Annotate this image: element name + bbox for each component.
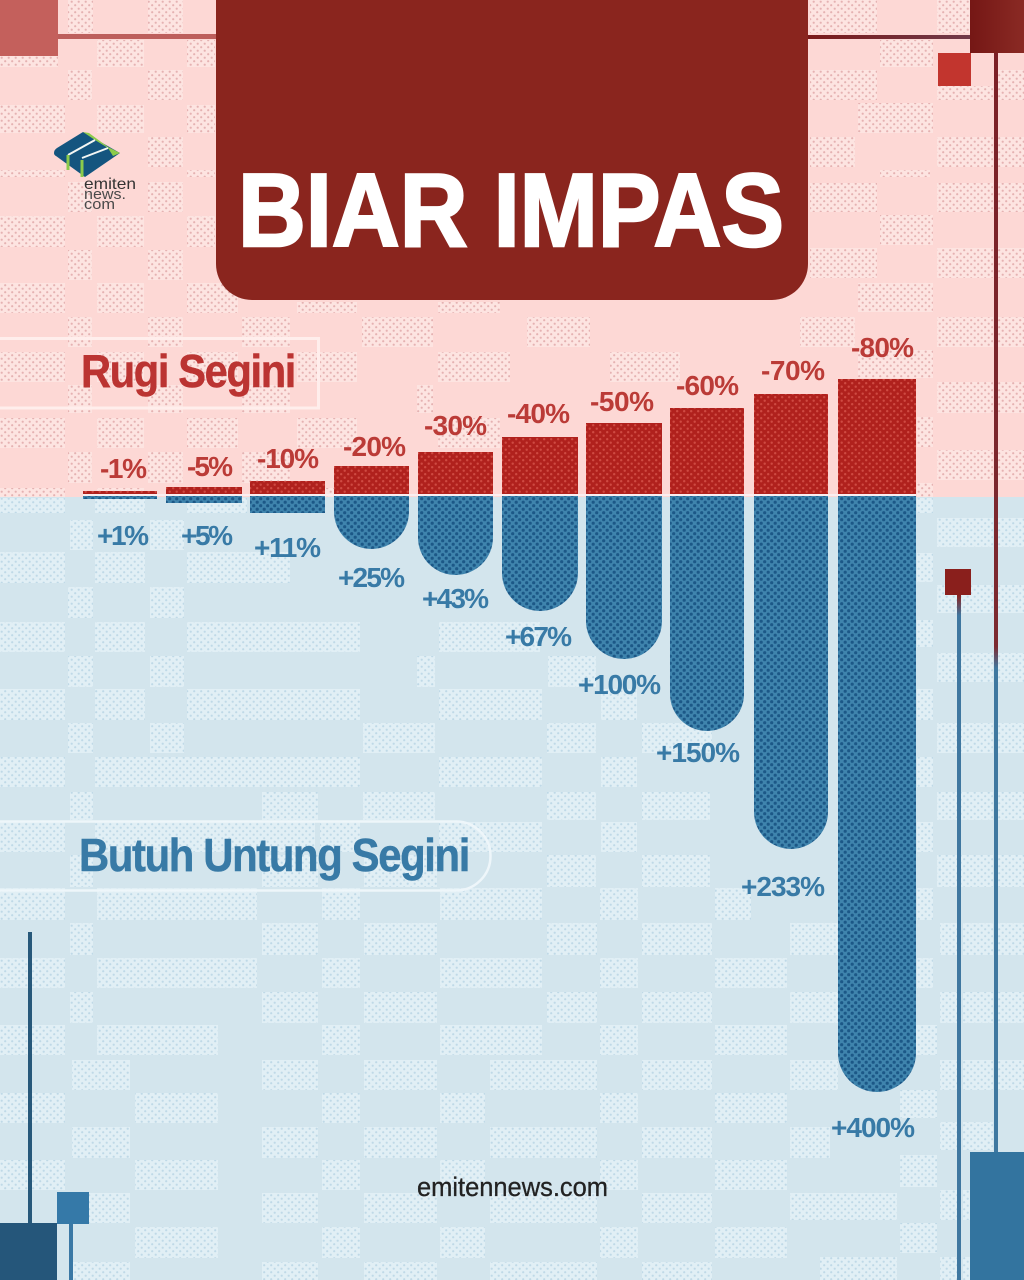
title: BIAR IMPAS: [238, 153, 784, 269]
bar chart: loss versus required gain: [83, 332, 916, 1143]
logo: emitennews.com: news.: [84, 186, 126, 203]
bar pair: -60% / +150%: -60%: [676, 370, 739, 401]
bar pair: -80% / +400%: -80%: [851, 332, 914, 363]
bar pair: -70% / +233%: +233%: [741, 871, 825, 902]
bar pair: -40% / +67%: +67%: [505, 621, 572, 652]
blue dotted checker patches: [0, 498, 1024, 1280]
bar pair: -50% / +100%: +100%: [578, 669, 661, 700]
pink dotted checker patches: [0, 0, 1024, 497]
bar pair: -60% / +150%: [656, 370, 744, 768]
pink background (top half): [0, 0, 1024, 497]
bar pair: -20% / +25%: [334, 431, 409, 593]
vertical marker: dark red square with rule: [945, 569, 971, 1280]
bar pair: -1% / +1%: -1%: [100, 453, 147, 484]
corner accent: bottom left squares and rules: [0, 932, 89, 1280]
bar pair: -5% / +5%: -5%: [187, 451, 233, 482]
label box: Rugi Segini: [0, 338, 318, 408]
bar pair: -30% / +43%: [418, 410, 493, 614]
bar pair: -70% / +233%: -70%: [761, 355, 825, 386]
bar pair: -20% / +25%: +25%: [338, 562, 405, 593]
bar pair: -30% / +43%: -30%: [424, 410, 487, 441]
bar pair: -50% / +100%: -50%: [590, 386, 654, 417]
bar pair: -20% / +25%: -20%: [343, 431, 406, 462]
corner accent: top right square, rule and small square: [808, 0, 1024, 86]
bar pair: -40% / +67%: -40%: [507, 398, 570, 429]
bar pair: -70% / +233%: [741, 355, 828, 902]
bar pair: -50% / +100%: [578, 386, 662, 700]
label box: Rugi Segini: Rugi Segini: [81, 345, 295, 397]
bar pair: -80% / +400%: [831, 332, 916, 1143]
bar pair: -1% / +1%: [83, 453, 157, 551]
bar pair: -40% / +67%: [502, 398, 578, 652]
logo: emitennews.com: com: [84, 196, 115, 213]
bar pair: -10% / +11%: -10%: [257, 443, 319, 474]
bar pair: -10% / +11%: [250, 443, 325, 563]
bar pair: -5% / +5%: +5%: [181, 520, 233, 551]
bar pair: -60% / +150%: +150%: [656, 737, 740, 768]
bar pair: -10% / +11%: +11%: [254, 532, 321, 563]
bar pair: -80% / +400%: +400%: [831, 1112, 915, 1143]
bar pair: -30% / +43%: +43%: [422, 583, 489, 614]
label pill: Butuh Untung Segini: Butuh Untung Segini: [79, 829, 469, 881]
logo: emitennews.com: [54, 132, 136, 213]
blue background (bottom half): [0, 497, 1024, 1280]
baseline gap: [83, 494, 916, 496]
label pill: Butuh Untung Segini: [0, 822, 491, 890]
corner accent: bottom right blue square: [970, 1152, 1024, 1280]
title panel: [216, 0, 808, 300]
bar pair: -5% / +5%: [166, 451, 242, 551]
bar pair: -1% / +1%: +1%: [97, 520, 149, 551]
footer website: emitennews.com: [417, 1172, 608, 1202]
logo: emitennews.com: emiten: [84, 176, 136, 193]
vertical rule: right, red to blue: [994, 53, 998, 1153]
corner accent: top left square and rule: [0, 0, 216, 56]
